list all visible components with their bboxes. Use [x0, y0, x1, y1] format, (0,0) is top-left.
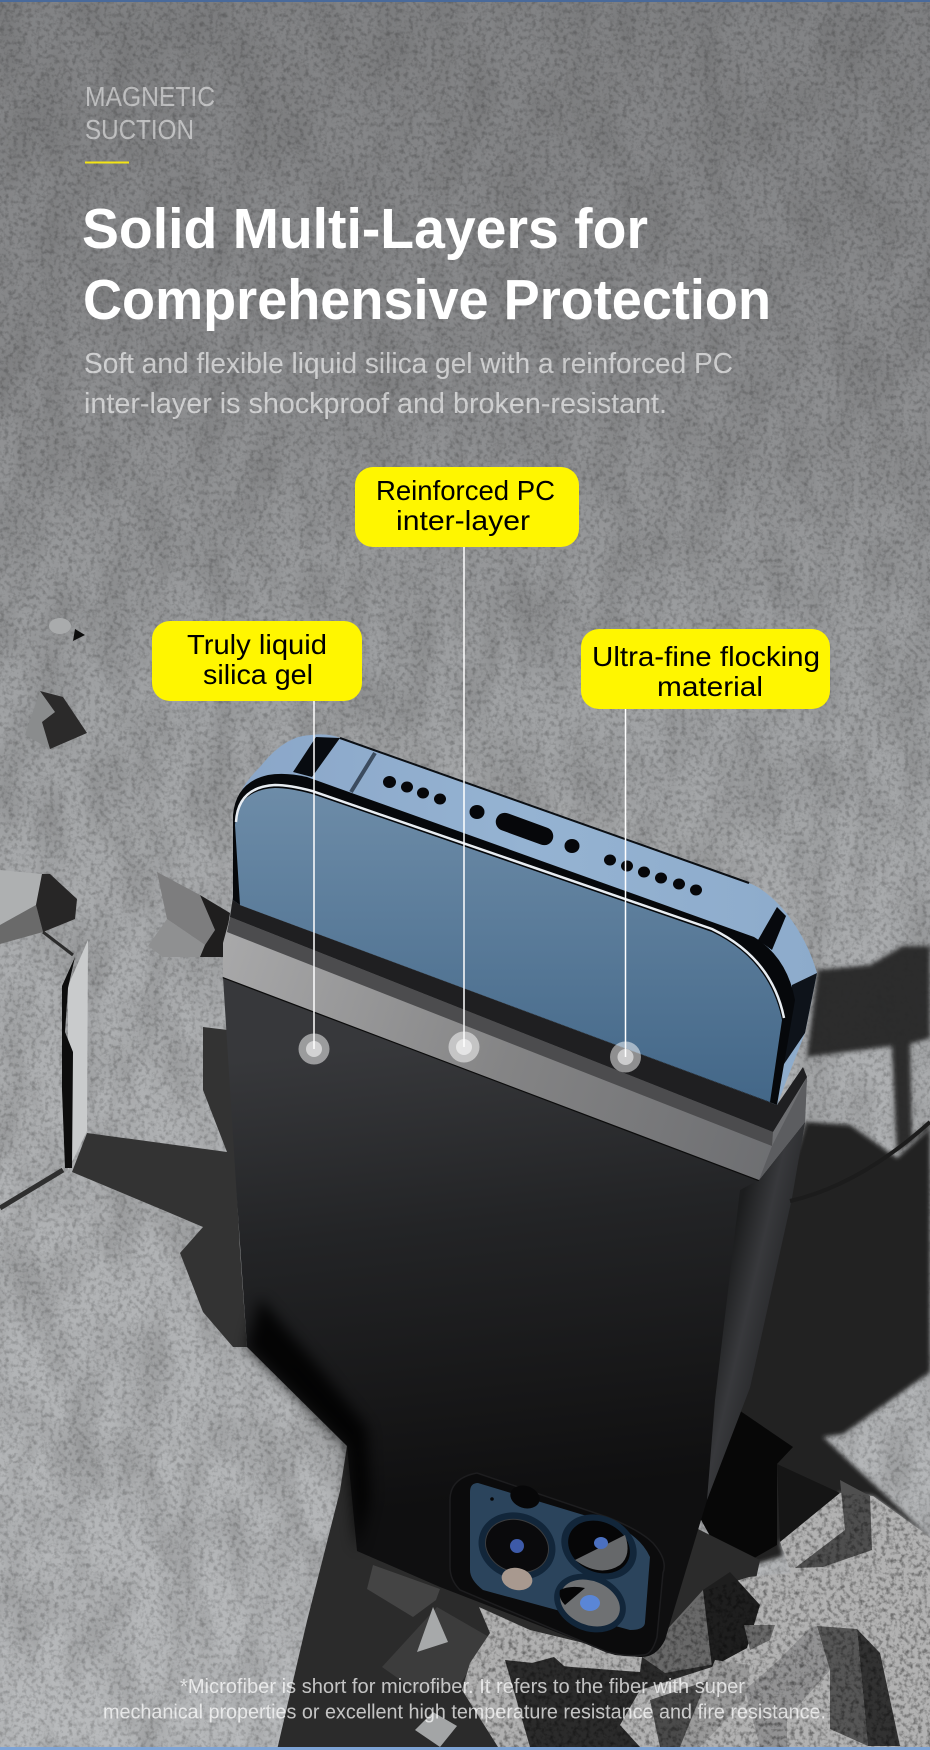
speaker and port holes: [383, 776, 702, 896]
callout: truly liquid silica gel: silica gel: [203, 659, 313, 690]
subtitle: [84, 348, 733, 420]
callout: reinforced PC inter-layer: [355, 467, 579, 1062]
eyebrow label: SUCTION: [85, 114, 194, 145]
flocking felt layer: [230, 897, 807, 1132]
grey silica band: [223, 917, 807, 1180]
footnote: [103, 1676, 826, 1724]
metal phone frame: [233, 734, 817, 1105]
callout: ultra-fine flocking material: [581, 629, 830, 1072]
title: Comprehensive Protection: [83, 268, 771, 332]
cracked concrete chunks, left side: [0, 618, 247, 1347]
title: Solid Multi-Layers for: [82, 197, 648, 261]
shadow strap line: [790, 1122, 930, 1201]
phone in case: [223, 734, 817, 1657]
cast shadow of the phone, right side: [690, 946, 930, 1572]
callout: reinforced PC inter-layer: Reinforced PC: [376, 475, 555, 506]
callout: reinforced PC inter-layer: inter-layer: [396, 505, 530, 536]
callout: truly liquid silica gel: Truly liquid: [187, 629, 327, 660]
callout: ultra-fine flocking material: Ultra-fine flocking: [592, 641, 820, 672]
footnote: mechanical properties or excellent high temperature resistance and fire resistance.: [103, 1702, 826, 1724]
camera module: [450, 1473, 664, 1656]
case body: [223, 977, 805, 1657]
title: [82, 197, 771, 332]
eyebrow label: [85, 81, 215, 145]
phone screen: [235, 785, 784, 1102]
callout: truly liquid silica gel: [152, 621, 362, 1064]
subtitle: inter-layer is shockproof and broken-resistant.: [84, 388, 667, 420]
rubble and shadow beneath the phone: [277, 1446, 930, 1750]
footnote: *Microfiber is short for microfiber. It refers to the fiber with super: [180, 1676, 745, 1698]
subtitle: Soft and flexible liquid silica gel with a reinforced PC: [84, 348, 733, 380]
callout: ultra-fine flocking material: material: [657, 671, 763, 702]
eyebrow label: MAGNETIC: [85, 81, 215, 112]
yellow accent line: [85, 162, 129, 164]
bottom edge strip: [0, 1747, 930, 1750]
